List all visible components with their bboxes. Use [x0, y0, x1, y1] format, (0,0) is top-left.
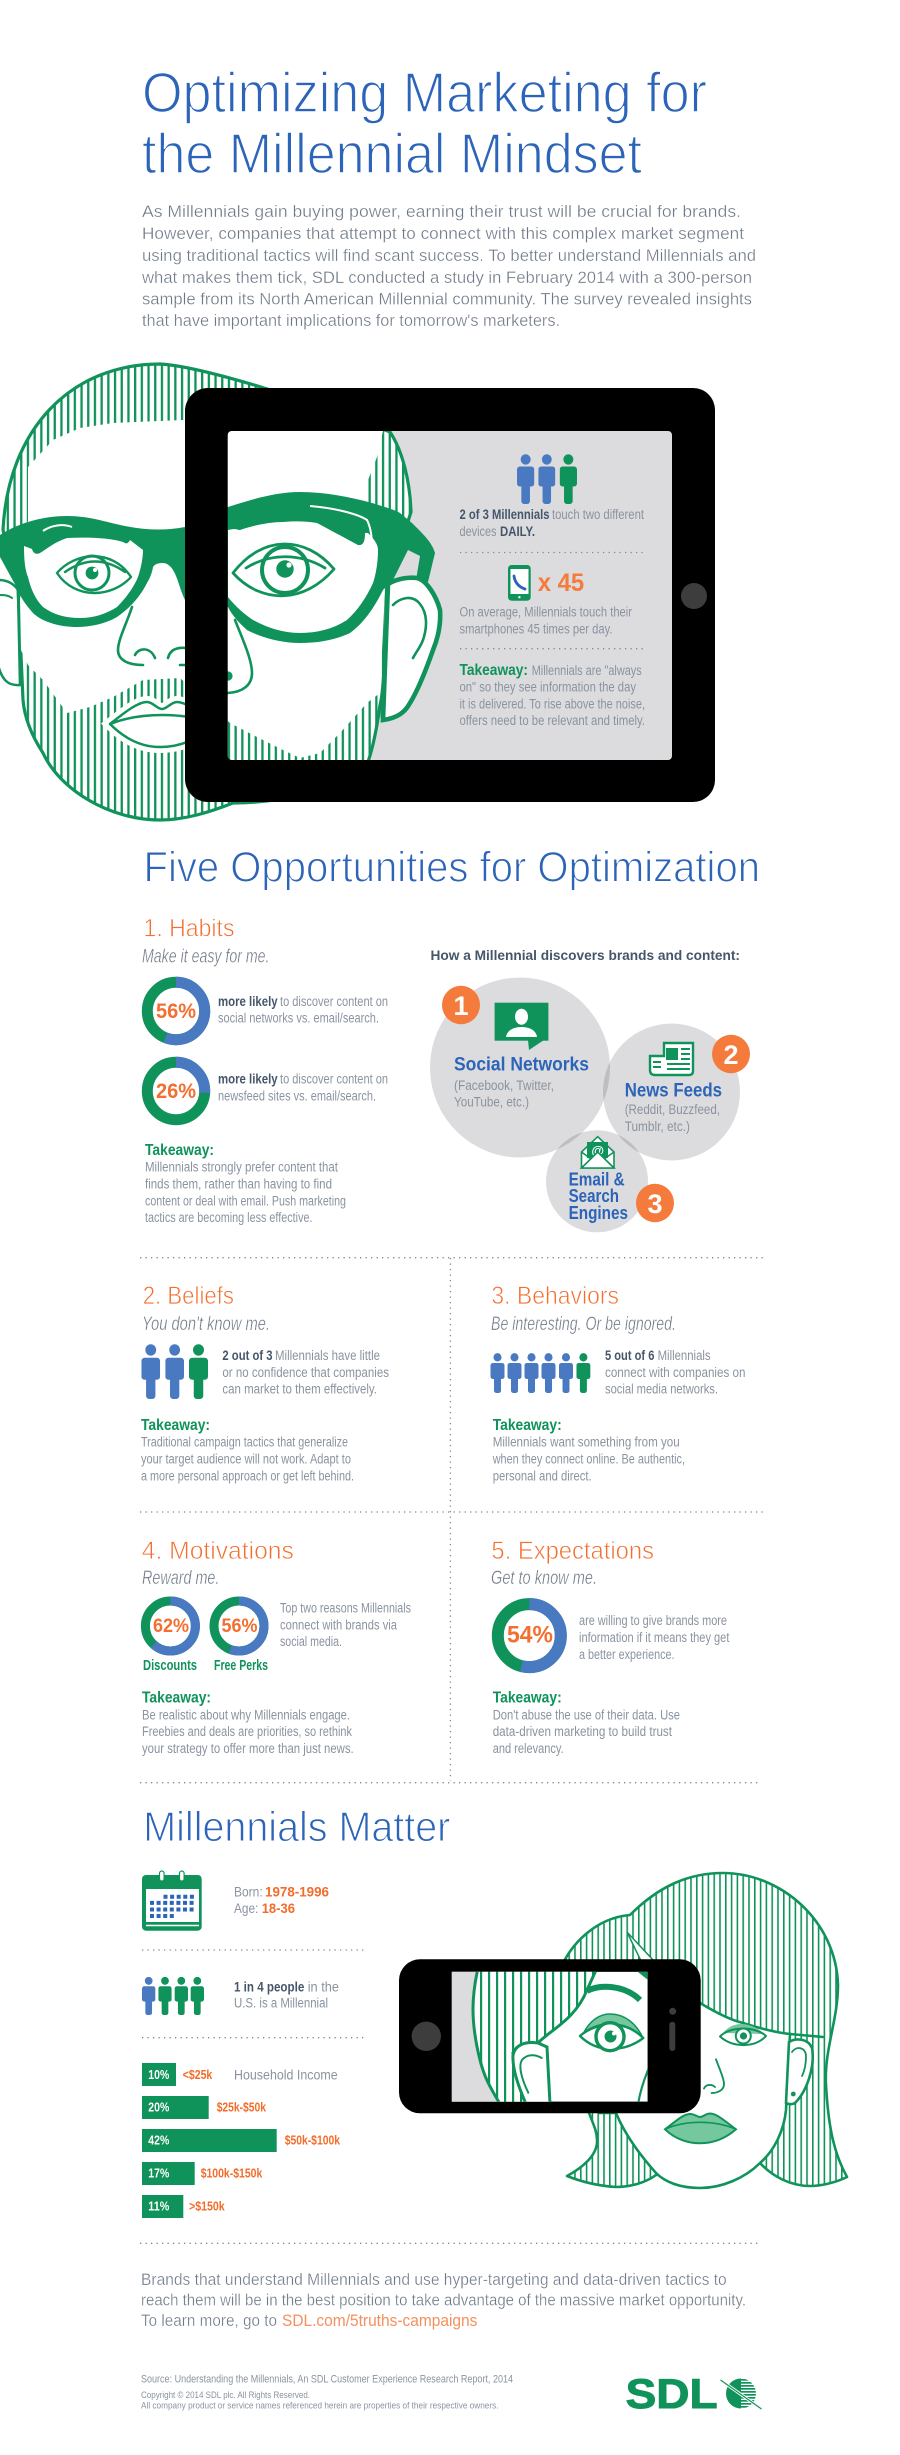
takeaway: habits: finds them, rather than having to find	[145, 1176, 332, 1192]
left ear	[0, 580, 20, 685]
section heading: millennials matter: Millennials Matter	[143, 1803, 450, 1850]
stat text: expectations: information if it means they get	[579, 1630, 730, 1645]
tablet stats panel	[460, 454, 646, 728]
nose	[118, 607, 252, 693]
icon: smartphone	[508, 565, 531, 601]
bang spike	[627, 1932, 654, 1961]
nose	[704, 2059, 724, 2093]
stat text: beliefs: or no confidence that companies	[222, 1365, 389, 1380]
stat: two devices daily: touch two different	[552, 507, 644, 522]
panel: 4. motivations	[142, 1537, 411, 1756]
stat text: behaviors: Millennials	[658, 1348, 711, 1363]
bar: under 25k: 10%	[148, 2067, 170, 2082]
donut: free perks 56 percent: 56%	[222, 1616, 258, 1637]
stat text: motivations: Top two reasons Millennials	[280, 1601, 411, 1616]
badge: number 3	[636, 1184, 674, 1222]
donut: 54 percent	[498, 1604, 561, 1667]
lips	[665, 2114, 736, 2143]
label: email and search engines: Engines	[569, 1203, 628, 1223]
face	[600, 2000, 790, 2188]
stat text: behaviors: connect with companies on	[605, 1365, 746, 1380]
chart label: household income: Household Income	[234, 2066, 338, 2082]
icon: six people	[490, 1353, 590, 1393]
stat text: beliefs: 2 out of 3	[222, 1348, 273, 1363]
intro paragraph: However, companies that attempt to connect with this complex market segment	[142, 225, 744, 243]
tablet home button	[681, 583, 707, 609]
takeaway: expectations: Takeaway:	[493, 1690, 562, 1707]
bar chart: household income	[142, 2063, 341, 2218]
badge: number 2: 2	[723, 1040, 739, 1070]
bar: 50k to 100k	[142, 2129, 341, 2152]
takeaway: behaviors	[492, 1417, 685, 1484]
stat text: beliefs: can market to them effectively.	[222, 1382, 377, 1396]
magnified ear	[513, 2042, 550, 2104]
takeaway: beliefs: your target audience will not work. Adapt to	[141, 1452, 351, 1466]
bar: under 25k	[142, 2063, 213, 2086]
donut: free perks 56 percent	[214, 1601, 264, 1651]
label: social networks: YouTube, etc.)	[454, 1095, 529, 1110]
label: news feeds: Tumblr, etc.)	[625, 1119, 690, 1134]
tagline: get to know me: Get to know me.	[491, 1568, 597, 1589]
stat text: social networks: more likely	[218, 994, 278, 1009]
takeaway: beliefs: a more personal approach or get left behind.	[141, 1468, 354, 1484]
stat: birth years and age: 18-36	[262, 1900, 295, 1916]
stat text: newsfeed sites	[218, 1072, 388, 1104]
icon: newspaper	[650, 1043, 693, 1075]
face right edge	[382, 587, 388, 717]
badge: number 1: 1	[453, 991, 469, 1021]
icon: four people	[142, 1977, 204, 2015]
label: social networks: (Facebook, Twitter,	[454, 1078, 554, 1093]
panel: 2. beliefs	[141, 1282, 389, 1484]
donut: 26 percent: 26%	[156, 1080, 196, 1103]
eye	[720, 2024, 766, 2045]
glasses	[0, 492, 435, 643]
takeaway: behaviors: when they connect online. Be authentic,	[492, 1452, 685, 1466]
stat: one in four: in the	[308, 1980, 339, 1995]
stat: two devices daily	[460, 507, 644, 539]
icon: social profile bubble	[495, 1003, 548, 1050]
stat: one in four: 1 in 4 people	[234, 1980, 305, 1995]
donut: discounts 62 percent: 62%	[153, 1616, 189, 1637]
stat text: smartphone touches: smartphones 45 times per day.	[460, 622, 612, 636]
label: email and search engines: Email &	[569, 1170, 625, 1190]
phone screen with magnified face	[452, 1968, 648, 2104]
intro paragraph: what makes them tick, SDL conducted a study in February 2014 with a 300-person	[141, 269, 752, 287]
magnified eyebrow	[587, 1987, 640, 2000]
takeaway: beliefs	[141, 1417, 354, 1484]
illustration: woman's face	[560, 1873, 847, 2188]
stat text: motivations: social media.	[280, 1634, 342, 1649]
panel: how a millennial discovers brands	[430, 947, 750, 1232]
heading: habits: 1. Habits	[144, 915, 234, 943]
bar: over 150k: >$150k	[189, 2198, 225, 2213]
panel: 5. expectations	[491, 1537, 730, 1756]
takeaway: behaviors: personal and direct.	[493, 1468, 592, 1484]
left ear inner curve	[0, 595, 12, 598]
takeaway: habits: content or deal with email. Push marketing	[145, 1194, 346, 1208]
takeaway: behaviors: Takeaway:	[493, 1417, 562, 1434]
heading: expectations: 5. Expectations	[491, 1537, 654, 1565]
takeaway: motivations: Freebies and deals are priorities, so rethink	[142, 1724, 352, 1739]
tagline: reward me: Reward me.	[142, 1568, 219, 1589]
stat text: expectations	[579, 1613, 730, 1662]
takeaway: expectations: Don't abuse the use of their data. Use	[493, 1707, 680, 1722]
tablet screen background	[228, 431, 672, 760]
intro paragraph: using traditional tactics will find scant success. To better understand Millennials and	[142, 247, 756, 265]
head and hatched hair	[3, 364, 411, 820]
takeaway: habits: Millennials strongly prefer content that	[145, 1160, 338, 1175]
label: news feeds	[625, 1080, 722, 1134]
right ear inner curve	[393, 598, 426, 658]
donut: 56 percent: 56%	[156, 1000, 196, 1023]
logo: SDL	[626, 2370, 762, 2417]
right ear	[383, 578, 440, 720]
stat: two devices daily: DAILY.	[500, 524, 535, 539]
badge: number 1	[442, 986, 480, 1024]
donut labels: Free Perks	[214, 1658, 268, 1674]
source and copyright: All company product or service names referenced herein are properties of their respective owners.	[141, 2401, 498, 2412]
takeaway: motivations	[142, 1690, 354, 1756]
title: the Millennial Mindset	[142, 122, 642, 186]
bar: 100k to 150k: 17%	[148, 2166, 170, 2181]
panel: demographics	[142, 1871, 366, 2218]
stat text: behaviors	[605, 1348, 746, 1396]
stat: one in four	[234, 1980, 339, 2011]
hair	[560, 1873, 847, 2187]
bar: 25k to 50k: $25k-$50k	[217, 2100, 267, 2115]
magnified eye	[580, 2014, 643, 2051]
stat text: smartphone touches: On average, Millennials touch their	[460, 605, 632, 620]
glasses highlights	[43, 506, 372, 547]
bar: 50k to 100k: 42%	[148, 2133, 170, 2148]
stat text: expectations: are willing to give brands more	[579, 1613, 727, 1628]
stat text: newsfeed sites: newsfeed sites vs. email/search.	[218, 1088, 376, 1104]
stat text: social networks: social networks vs. email/search.	[218, 1011, 379, 1026]
takeaway: expectations	[493, 1690, 680, 1756]
logo: SDL: SDL	[626, 2370, 718, 2417]
donut labels	[143, 1658, 268, 1674]
badge: number 3: 3	[647, 1189, 663, 1219]
bar: 25k to 50k	[142, 2096, 267, 2119]
icon: email envelope	[582, 1137, 614, 1168]
bar: 100k to 150k	[142, 2162, 263, 2185]
heading: beliefs: 2. Beliefs	[143, 1282, 234, 1310]
bar: over 150k: 11%	[148, 2198, 170, 2213]
takeaway: habits	[145, 1142, 346, 1225]
bar: under 25k: <$25k	[183, 2067, 213, 2082]
title	[142, 61, 707, 186]
bar: over 150k	[142, 2195, 225, 2218]
label: social networks: Social Networks	[454, 1054, 589, 1076]
intro paragraph: As Millennials gain buying power, earning their trust will be crucial for brands.	[142, 203, 741, 221]
stat text: behaviors: social media networks.	[605, 1382, 718, 1396]
donut: 56 percent	[147, 982, 205, 1040]
takeaway: motivations: Takeaway:	[142, 1690, 211, 1707]
stat text: social networks	[218, 994, 388, 1026]
icon: calendar	[142, 1871, 202, 1931]
right nostril	[223, 671, 233, 681]
stat: two devices daily: 2 of 3 Millennials	[460, 507, 550, 522]
source and copyright	[141, 2374, 513, 2412]
screen background	[452, 1971, 500, 2103]
stat text: behaviors: 5 out of 6	[605, 1348, 655, 1363]
takeaway: always on: offers need to be relevant and timely.	[460, 713, 645, 728]
takeaway: always on: it is delivered. To rise above the noise,	[460, 696, 645, 712]
stat: birth years and age	[234, 1884, 329, 1916]
donut: 26 percent	[147, 1062, 205, 1120]
phone home button	[412, 2022, 441, 2051]
donut labels: Discounts	[143, 1658, 197, 1674]
takeaway: behaviors: Millennials want something from you	[493, 1435, 680, 1450]
takeaway: always on: Takeaway:	[460, 662, 528, 679]
intro paragraph: that have important implications for tomorrow's marketers.	[142, 312, 560, 330]
stat text: newsfeed sites: to discover content on	[280, 1072, 388, 1087]
label: email and search engines: Search	[569, 1186, 619, 1206]
phone camera	[669, 2008, 676, 2015]
icon: three people	[141, 1344, 208, 1399]
tagline: make it easy: Make it easy for me.	[142, 947, 270, 968]
donut: 54 percent: 54%	[507, 1622, 553, 1649]
closing statement	[141, 2271, 746, 2330]
tagline: be interesting: Be interesting. Or be ignored.	[491, 1314, 676, 1335]
stat text: motivations	[280, 1601, 411, 1649]
stat text: beliefs: Millennials have little	[275, 1348, 380, 1363]
bar: 50k to 100k: $50k-$100k	[285, 2133, 341, 2148]
magnified hair	[473, 1968, 597, 2104]
label: social networks	[454, 1054, 589, 1110]
label: news feeds: News Feeds	[625, 1080, 722, 1102]
takeaway: beliefs: Traditional campaign tactics that generalize	[141, 1435, 348, 1450]
closing statement: Brands that understand Millennials and use hyper-targeting and data-driven tactics to	[141, 2271, 727, 2289]
lips	[110, 702, 214, 747]
source and copyright: Copyright © 2014 SDL plc. All Rights Reserved.	[141, 2390, 310, 2401]
panel heading: How a Millennial discovers brands and content:	[430, 947, 740, 963]
badge: number 2	[712, 1035, 750, 1073]
heading: motivations: 4. Motivations	[142, 1537, 294, 1565]
magnified ear inner	[520, 2055, 542, 2093]
stat: birth years and age: Born:	[234, 1884, 263, 1900]
stat: one in four: U.S. is a Millennial	[234, 1996, 328, 2011]
ear	[786, 2040, 813, 2104]
takeaway: always on: on" so they see information the day	[460, 680, 636, 695]
closing statement: reach them will be in the best position to take advantage of the massive market opportunity.	[141, 2292, 746, 2310]
icon: three people, two blue one green	[517, 454, 577, 504]
venn circles	[430, 978, 740, 1232]
intro paragraph: sample from its North American Millennial community. The survey revealed insights	[142, 290, 752, 308]
fringe line	[790, 2034, 823, 2037]
panel: 3. behaviors	[490, 1282, 746, 1484]
phone speaker	[669, 2022, 675, 2051]
title: Optimizing Marketing for	[142, 61, 707, 125]
magnified cheek line	[638, 2070, 648, 2103]
takeaway: always on: Millennials are "always	[532, 663, 642, 678]
top right hair corner	[638, 1972, 648, 1980]
closing statement: To learn more, go to	[141, 2312, 277, 2330]
stat: times 45: x 45	[538, 569, 584, 597]
illustration: man's face with glasses	[0, 364, 440, 820]
closing statement: SDL.com/5truths-campaigns	[282, 2312, 477, 2330]
heading: behaviors: 3. Behaviors	[491, 1282, 619, 1310]
takeaway: expectations: and relevancy.	[493, 1741, 564, 1756]
stat text: motivations: connect with brands via	[280, 1618, 397, 1632]
bar: 100k to 150k: $100k-$150k	[201, 2166, 263, 2181]
stat: birth years and age: Age:	[234, 1900, 258, 1916]
tablet frame	[185, 388, 715, 802]
takeaway: motivations: Be realistic about why Millennials engage.	[142, 1707, 350, 1722]
stat text: newsfeed sites: more likely	[218, 1072, 278, 1087]
takeaway: habits: Takeaway:	[145, 1142, 214, 1159]
icon: email envelope: @	[591, 1143, 604, 1158]
section heading: five opportunities: Five Opportunities for Optimization	[144, 844, 760, 892]
source and copyright: Source: Understanding the Millennials, An SDL Customer Experience Research Report, 2014	[141, 2374, 513, 2386]
takeaway: motivations: your strategy to offer more than just news.	[142, 1741, 354, 1756]
donut: discounts 62 percent	[145, 1601, 195, 1651]
stat text: expectations: a better experience.	[579, 1647, 674, 1662]
stat: two devices daily: devices	[460, 524, 497, 539]
panel: 1. habits	[142, 915, 388, 1225]
stat text: smartphone touches	[460, 605, 632, 636]
takeaway: habits: tactics are becoming less effective.	[145, 1210, 312, 1225]
stat text: social networks: to discover content on	[280, 994, 388, 1009]
takeaway: beliefs: Takeaway:	[141, 1417, 210, 1434]
stat text: beliefs	[222, 1348, 389, 1396]
stat: birth years and age: 1978-1996	[265, 1884, 329, 1900]
tagline: you don't know me: You don't know me.	[142, 1314, 270, 1335]
bar: 25k to 50k: 20%	[148, 2100, 170, 2115]
left eye	[57, 556, 131, 593]
takeaway: always on	[460, 662, 645, 728]
phone body	[399, 1959, 701, 2113]
intro paragraph	[141, 203, 756, 330]
right eye	[233, 544, 334, 596]
label: email and search engines	[569, 1170, 628, 1223]
takeaway: expectations: data-driven marketing to build trust	[493, 1724, 672, 1739]
bare face area	[20, 415, 385, 758]
label: news feeds: (Reddit, Buzzfeed,	[625, 1102, 720, 1117]
